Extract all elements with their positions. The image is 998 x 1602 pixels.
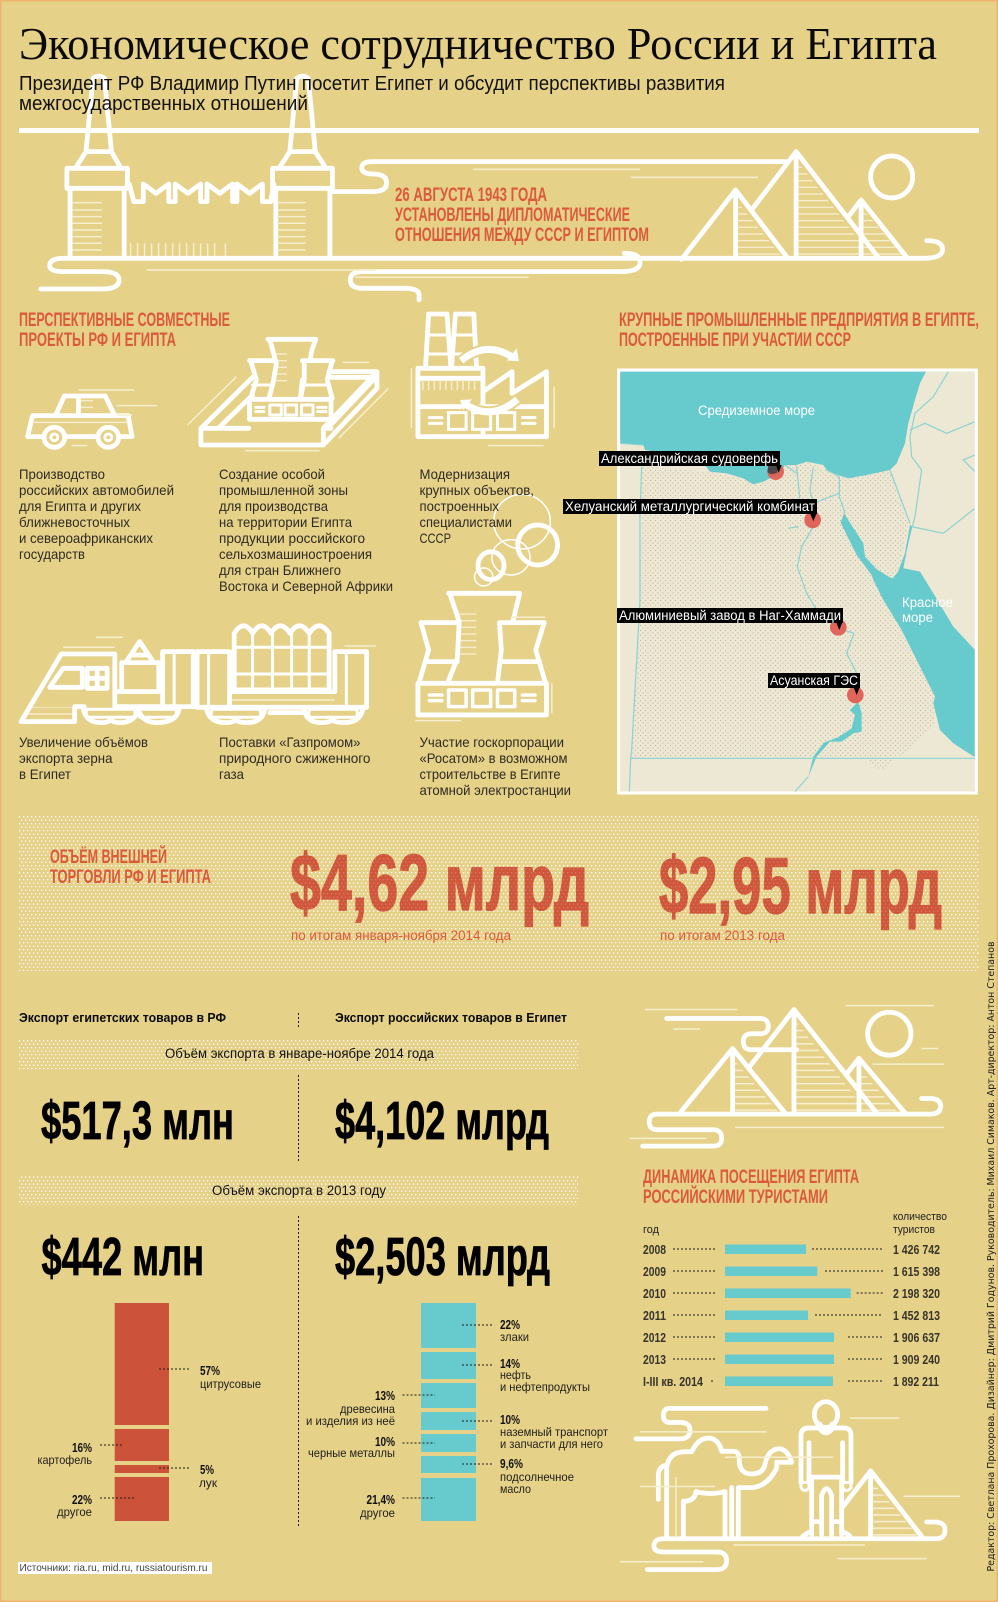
labels: Russian exports: черные металлы [308,1446,395,1460]
right column illustrations [620,1006,960,1570]
icon: industrial zone [188,339,388,451]
callout: 26 August 1943 [395,185,649,246]
number: 4.102: $4,102 млрд [335,1091,549,1151]
red markers [767,463,864,703]
years: 2008 [643,1242,666,1257]
labels: Russian exports: 13% [375,1388,395,1403]
band: 2013: Объём экспорта в 2013 году [212,1183,386,1198]
Nile and Lake Nasser [808,702,862,777]
heading: map [619,310,979,351]
text: industrial zone: Создание особой [219,466,325,482]
text: grain: экспорта зерна [19,750,113,766]
heading: map: ПОСТРОЕННЫЕ ПРИ УЧАСТИИ СССР [619,330,851,351]
text: industrial zone: сельхозмашиностроения [219,546,372,562]
labels: Egyptian exports: лук [199,1476,218,1490]
years: I-III кв. 2014 [643,1374,704,1389]
text: industrial zone: на территории Египта [219,514,352,530]
years: 2009 [643,1264,666,1279]
text: cars: Производство [19,466,105,482]
values: 1 452 813 [893,1308,940,1323]
years: 2013 [643,1352,666,1367]
pointers [776,465,860,695]
map sea labels: море [902,610,933,625]
years: 2010 [643,1286,666,1301]
callout: 26 August 1943: ОТНОШЕНИЯ МЕЖДУ СССР И ЕГИПТОМ [395,225,649,246]
band: 2014: Объём экспорта в январе-ноябре 2014 года [165,1046,434,1061]
text: modernisation: СССР [420,530,451,546]
text: industrial zone: для стран Ближнего [219,562,341,578]
heading: joint projects: ПРОЕКТЫ РФ И ЕГИПТА [19,330,176,351]
text: industrial zone [219,466,393,594]
labels: Russian exports: подсолнечное [500,1470,574,1484]
map label: Helwan: Хелуанский металлургический комбинат [565,499,815,514]
heading: tourists: ДИНАМИКА ПОСЕЩЕНИЯ ЕГИПТА [643,1167,859,1188]
labels: Egyptian exports: 16% [72,1440,92,1455]
text: cars: и североафриканских [19,530,153,546]
text: gas: Поставки «Газпромом» [219,734,361,750]
subtitle: Президент РФ Владимир Путин посетит Египет и обсудит перспективы развития [19,72,725,95]
text: industrial zone: промышленной зоны [219,482,348,498]
map label: Nag Hammadi: Алюминиевый завод в Наг-Хаммади [619,608,841,623]
labels: Russian exports: 10% [375,1434,395,1449]
values [893,1242,940,1389]
labels: Egyptian exports: картофель [38,1453,92,1467]
years: 2011 [643,1308,666,1323]
heading: trade: ТОРГОВЛИ РФ И ЕГИПТА [50,867,211,888]
number: 517.3: $517,3 млн [41,1091,234,1151]
map sea labels [698,403,953,625]
band: 2014 [19,1040,578,1069]
caption: 2014: по итогам января-ноября 2014 года [291,928,511,943]
number: 2.503: $2,503 млрд [335,1227,550,1287]
credits: Редактор: Светлана Прохорова. Дизайнер: Дмитрий Годунов. Руководитель: Михаил Симаков. Арт-директор: Антон Степанов [986,941,997,1572]
icon: nuclear plant [415,593,552,721]
caption: 2013: по итогам 2013 года [660,928,785,943]
project icons [21,314,558,723]
map sea labels: Красное [902,595,953,610]
text: modernisation: построенных [420,498,499,514]
labels: Russian exports: 9,6% [500,1456,523,1471]
values: 1 906 637 [893,1330,940,1345]
labels: Russian exports [306,1317,608,1520]
text: modernisation [420,466,534,546]
text: modernisation: Модернизация [420,466,510,482]
labels: Russian exports: другое [360,1506,395,1520]
text: industrial zone: для производства [219,498,328,514]
band: 2013 [19,1176,578,1205]
sources: Источники: ria.ru, mid.ru, russiatourism.ru [20,1562,208,1574]
icon: smoke circles [475,494,558,586]
labels: Russian exports: и запчасти для него [500,1437,603,1451]
icon: three pyramids [681,152,908,259]
icon: freight train [21,626,376,723]
column heading: Russia to Egypt: Экспорт российских товаров в Египет [335,1010,567,1025]
text: gas: газа [219,766,244,782]
heading: trade [50,846,211,888]
values: 1 615 398 [893,1264,940,1279]
Mediterranean Sea [620,372,926,484]
map frame [619,370,976,793]
icon: Kremlin towers and wall [67,76,332,258]
Gulf of Suez [841,513,893,582]
column headers: год [643,1224,660,1236]
labels: Egyptian exports: 57% [200,1363,220,1378]
icon: sun [871,156,913,198]
text: Rosatom: атомной электростанции [420,782,571,798]
labels: Russian exports: 22% [500,1317,520,1332]
icon: factory with arrows [411,314,554,446]
text: grain: Увеличение объёмов [19,734,148,750]
icon: pyramids [629,1006,944,1146]
text: industrial zone: Востока и Северной Африки [219,578,393,594]
years: 2012 [643,1330,666,1345]
project descriptions [19,466,571,798]
years [643,1242,704,1389]
divider rule [19,128,979,133]
subtitle: межгосударственных отношений [19,92,308,115]
number: 442: $442 млн [42,1227,204,1287]
column heading: Egypt to Russia: Экспорт египетских товаров в РФ [19,1010,226,1025]
map of Egypt [619,370,976,793]
text: cars: ближневосточных [19,514,130,530]
labels: Russian exports: 21,4% [366,1492,395,1507]
labels: Russian exports: древесина [340,1402,395,1416]
text: cars: для Египта и других [19,498,141,514]
labels: Egyptian exports: другое [57,1505,92,1519]
labels: Russian exports: и изделия из неё [306,1414,395,1428]
bars [725,1244,851,1386]
text: modernisation: крупных объектов, [420,482,534,498]
column headers [643,1211,947,1236]
icon: camel, man and pyramid [620,1402,960,1570]
labels: Russian exports: злаки [500,1330,529,1344]
chart: tourist visits [643,1211,947,1389]
values: 1 909 240 [893,1352,940,1367]
heading: joint projects: ПЕРСПЕКТИВНЫЕ СОВМЕСТНЫЕ [19,310,230,331]
text: grain [19,734,148,782]
labels: Russian exports: масло [500,1482,531,1496]
callout: 26 August 1943: УСТАНОВЛЕНЫ ДИПЛОМАТИЧЕСКИЕ [395,205,630,226]
chart: Egyptian exports stack [115,1303,169,1521]
map label: Aswan: Асуанская ГЭС [770,673,858,688]
labels: Egyptian exports: цитрусовые [200,1377,261,1391]
text: industrial zone: продукции российского [219,530,365,546]
labels: Russian exports: наземный транспорт [500,1425,608,1439]
panel: trade volume [19,816,979,971]
text: Rosatom: «Росатом» в возможном [420,750,568,766]
labels: Egyptian exports [38,1363,261,1519]
callout: 26 August 1943: 26 АВГУСТА 1943 ГОДА [395,185,547,206]
values: 1 426 742 [893,1242,940,1257]
labels: Egyptian exports: 5% [200,1462,214,1477]
labels: Egyptian exports: 22% [72,1492,92,1507]
icon: car [28,390,157,447]
text: gas [219,734,371,782]
text: modernisation: специалистами [420,514,512,530]
illustration: Kremlin and pyramids [41,76,943,300]
number: 2014: $4,62 млрд [290,838,589,927]
heading: trade: ОБЪЁМ ВНЕШНЕЙ [50,846,167,868]
text: Rosatom: Участие госкорпорации [420,734,564,750]
text: grain: в Египет [19,766,72,782]
text: cars [19,466,174,562]
text: Rosatom: строительстве в Египте [420,766,561,782]
labels: Russian exports: и нефтепродукты [500,1380,590,1394]
labels: Russian exports: нефть [500,1368,531,1382]
heading: tourists: РОССИЙСКИМИ ТУРИСТАМИ [643,1186,828,1208]
desert area [631,462,935,769]
panel: export [19,1010,608,1528]
text: gas: природного сжиженного [219,750,371,766]
Red Sea [873,568,975,757]
chart: Russian exports stack [421,1303,476,1521]
Gulf of Aqaba [898,525,912,573]
title: Экономическое сотрудничество России и Египта [19,18,937,69]
text: cars: государств [19,546,85,562]
map sea labels: Средиземное море [698,403,815,418]
text: Rosatom [420,734,571,798]
heading: tourists [643,1167,859,1208]
labels: Russian exports: 10% [500,1412,520,1427]
map label: Alexandria: Александрийская судоверфь [601,451,778,466]
heading: joint projects [19,310,230,351]
column headers: туристов [893,1224,935,1236]
text: cars: российских автомобилей [19,482,174,498]
subtitle [19,72,725,115]
rivers and borders [620,372,975,792]
values: 2 198 320 [893,1286,940,1301]
column headers: количество [893,1211,947,1223]
ground and cloud lines [41,162,943,300]
values: 1 892 211 [893,1374,939,1389]
labels: Russian exports: 14% [500,1356,520,1371]
